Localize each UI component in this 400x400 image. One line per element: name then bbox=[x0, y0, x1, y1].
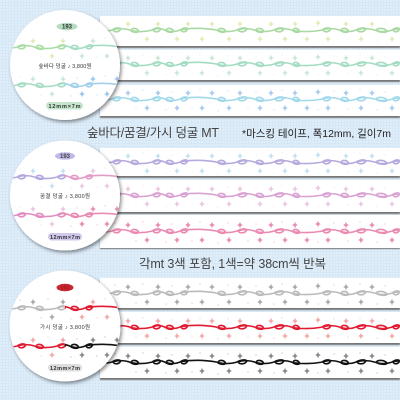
tape group 1: forest, dream, thorn colours bbox=[95, 16, 400, 118]
circle 2 number pill: 193 bbox=[60, 154, 71, 160]
circle 2 product label: 꿈결 덩굴 ♪ 3,800원 bbox=[40, 192, 90, 200]
sample circle 3 bbox=[8, 270, 124, 386]
caption: colour and repeat info: 각mt 3색 포함, 1색=약 38cm씩 반복 bbox=[139, 256, 326, 271]
circle 3 product label: 가시 덩굴 ♪ 3,800원 bbox=[40, 323, 90, 331]
circle 3 number pill bbox=[56, 284, 74, 292]
circle 2 upper vine bbox=[12, 168, 117, 190]
circle 3 number pill: 193 bbox=[60, 286, 70, 292]
tape strip: gray bbox=[95, 278, 400, 310]
circle 1 number pill bbox=[56, 23, 78, 31]
circle 3 lower vine bbox=[13, 336, 119, 358]
circle 1 lower vine bbox=[14, 76, 118, 98]
circle 3 size pill: 12mm×7m bbox=[50, 366, 80, 372]
tape group 3: gray, red, black bbox=[95, 278, 400, 380]
sample circle 2 bbox=[9, 140, 124, 255]
circle 2 lower vine bbox=[14, 206, 118, 228]
sample circle 1 bbox=[9, 10, 124, 124]
circle 2 size pill bbox=[48, 233, 82, 241]
circle 3 upper vine bbox=[12, 298, 118, 320]
circle 2 number pill bbox=[55, 152, 75, 160]
tape strip: teal bbox=[95, 50, 400, 82]
tape strip: orchid bbox=[95, 180, 400, 214]
tape strip: red bbox=[95, 312, 400, 345]
caption: tape spec: *마스킹 테이프, 폭12mm, 길이7m bbox=[242, 127, 391, 140]
tape strip: pink bbox=[95, 215, 400, 249]
tape group 2: purple, orchid, pink bbox=[95, 148, 400, 249]
circle 1 size pill bbox=[46, 102, 83, 110]
tape strip: green bbox=[95, 16, 400, 48]
circle 1 size pill: 12mm×7m bbox=[48, 104, 81, 110]
circle 2 size pill: 12mm×7m bbox=[50, 235, 80, 241]
caption: product name: 숲바다/꿈결/가시 덩굴 MT bbox=[87, 126, 219, 140]
tape strip: blue bbox=[95, 85, 400, 118]
tape strip: black bbox=[95, 347, 400, 380]
circle 1 number pill: 193 bbox=[62, 25, 73, 31]
tape strip: purple bbox=[95, 148, 400, 178]
circle 1 upper vine bbox=[12, 38, 117, 60]
circle 1 product label: 숲바다 덩굴 ♪ 3,800원 bbox=[38, 62, 92, 70]
circle 3 size pill bbox=[48, 364, 82, 372]
